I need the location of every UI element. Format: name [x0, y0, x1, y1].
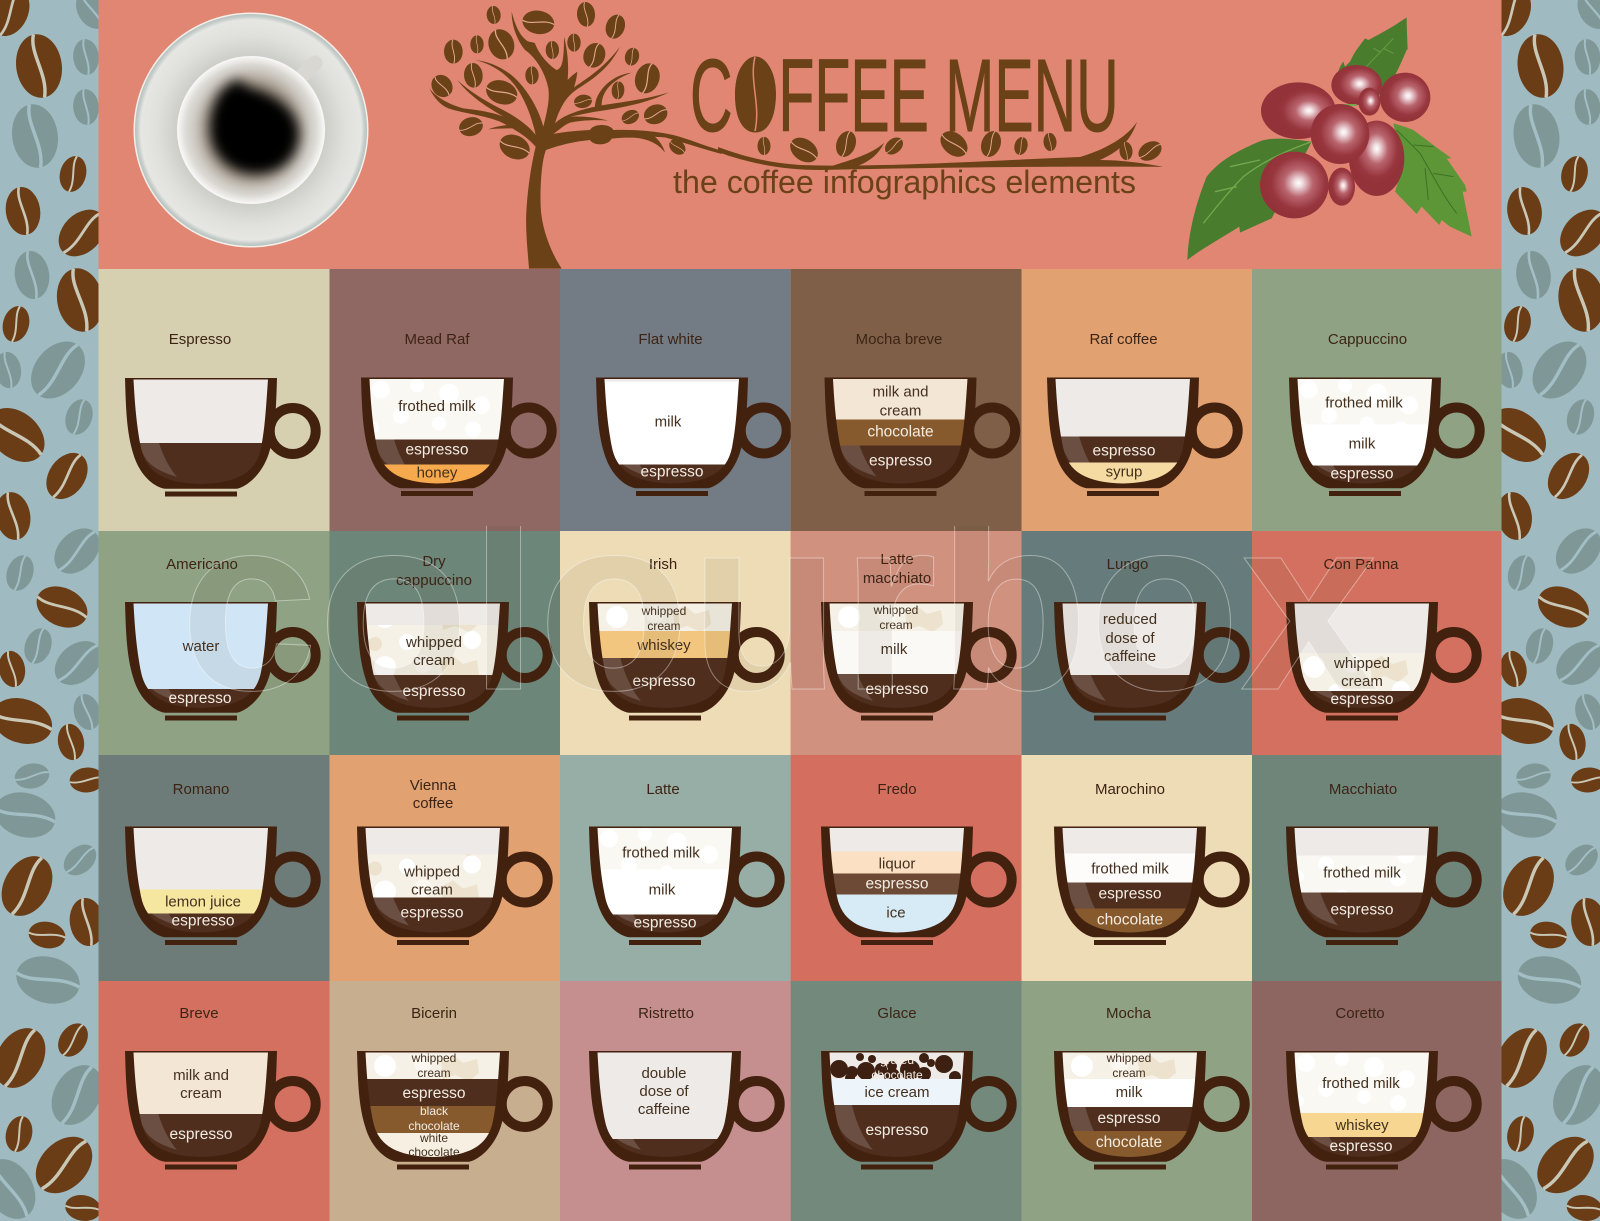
heading: Irish: Irish — [649, 556, 677, 573]
cup: Mocha — [1054, 1051, 1245, 1170]
tree beans — [427, 1, 1165, 168]
cup: Mocha: whipped — [1106, 1051, 1151, 1065]
panel: Latte — [560, 755, 791, 981]
cup: Con Panna — [1286, 602, 1477, 720]
heading: Dry cappuccino: Dry — [422, 553, 446, 570]
cup: Coretto — [1286, 1051, 1477, 1170]
panel: Con Panna — [1252, 531, 1502, 755]
cup: Mocha: milk — [1116, 1084, 1143, 1101]
cup: Dry cappuccino — [357, 602, 548, 720]
panel: Macchiato — [1252, 755, 1502, 981]
heading: Cappuccino: Cappuccino — [1328, 331, 1407, 348]
cup: Latte macchiato: milk — [881, 641, 908, 658]
cup: Glace: espresso — [866, 1122, 928, 1139]
cup: Bicerin: whipped — [411, 1051, 456, 1065]
cup: Fredo: ice — [886, 904, 906, 922]
panel: Ristretto — [560, 981, 791, 1221]
cup: Bicerin — [357, 1051, 548, 1170]
cup: Breve — [125, 1051, 316, 1170]
heading: Americano: Americano — [166, 556, 238, 573]
left coffee bean strip — [0, 0, 115, 1221]
cup: Raf coffee — [1047, 378, 1238, 496]
cup: Glace: ice cream — [864, 1084, 930, 1101]
cup: Con Panna: whipped — [1333, 655, 1390, 672]
cup: Bicerin: white — [419, 1131, 448, 1145]
heading: Lungo: Lungo — [1107, 556, 1148, 573]
panel: Espresso — [98, 269, 330, 531]
cup: Breve: cream — [180, 1085, 222, 1102]
cup: Vienna coffee: whipped — [403, 864, 460, 880]
cup: Irish: whipped — [641, 604, 686, 618]
cup: Irish — [589, 602, 780, 720]
cup: Mocha breve: espresso — [869, 452, 932, 470]
cup: Irish: whiskey — [636, 637, 691, 654]
cup: Romano — [125, 826, 316, 945]
cup: Fredo: espresso — [866, 876, 928, 892]
heading: Romano: Romano — [173, 781, 229, 798]
cup: Bicerin: chocolate — [408, 1119, 460, 1133]
cup: Mocha breve — [824, 378, 1015, 496]
cup: Glace: grated — [880, 1053, 914, 1067]
heading: Breve: Breve — [179, 1005, 219, 1022]
heading: Mocha: Mocha — [1106, 1005, 1152, 1022]
heading: Fredo: Fredo — [877, 781, 917, 798]
cup: Lungo: dose of — [1105, 630, 1155, 647]
panel: Mocha — [1022, 981, 1252, 1221]
panel: Breve — [98, 981, 330, 1221]
heading: Latte macchiato: Latte — [880, 551, 914, 568]
cup: Marochino: espresso — [1099, 886, 1161, 902]
panel: Fredo — [791, 755, 1022, 981]
panel: Bicerin — [330, 981, 560, 1221]
cup: Macchiato: frothed milk — [1323, 864, 1401, 882]
panel: Lungo — [1022, 531, 1252, 755]
cup: Latte: espresso — [634, 914, 696, 932]
cup: Ristretto — [589, 1051, 780, 1170]
cup: Romano: lemon juice — [165, 894, 241, 910]
heading: Raf coffee: Raf coffee — [1089, 331, 1158, 348]
cup: Macchiato — [1286, 826, 1477, 945]
heading: Con Panna: Con Panna — [1323, 556, 1399, 573]
cup: Mead Raf: honey — [417, 464, 458, 482]
cup: Flat white: milk — [655, 414, 682, 430]
heading: Latte macchiato: macchiato — [863, 570, 931, 587]
cup: Glace: chocolate — [871, 1068, 923, 1082]
cup: Glace — [821, 1051, 1012, 1170]
cup: Vienna coffee: cream — [411, 882, 453, 898]
cup: Irish: espresso — [633, 673, 695, 690]
cup: Vienna coffee: espresso — [401, 904, 463, 922]
cup: Cappuccino: milk — [1349, 436, 1376, 452]
cup: Fredo — [821, 826, 1012, 945]
heading: Marochino: Marochino — [1095, 781, 1165, 798]
cup: Mocha breve: chocolate — [867, 424, 934, 440]
cup: Latte: frothed milk — [622, 844, 700, 862]
title: COFFEE MENU: COFFEE MENU — [690, 38, 1119, 153]
heading: Bicerin: Bicerin — [411, 1005, 457, 1022]
cup: Bicerin: cream — [417, 1066, 451, 1080]
panel: Raf coffee — [1022, 269, 1252, 531]
cup: Dry cappuccino: espresso — [403, 683, 465, 700]
heading: Vienna coffee: coffee — [413, 795, 453, 812]
cup: Cappuccino — [1289, 378, 1480, 496]
cup: Irish: cream — [647, 619, 681, 633]
cup: Coretto: whiskey — [1334, 1117, 1389, 1134]
cup: Cappuccino: espresso — [1331, 466, 1393, 482]
cup: Dry cappuccino: cream — [413, 652, 455, 669]
cup: Americano: water — [182, 638, 219, 655]
icon: coffee bean letter O — [735, 56, 776, 132]
panel: Flat white — [560, 269, 791, 531]
panel: Cappuccino — [1252, 269, 1502, 531]
cup: Latte: milk — [649, 882, 676, 898]
heading: Latte: Latte — [646, 781, 680, 798]
cup: Lungo — [1054, 602, 1245, 720]
cup: Marochino — [1054, 826, 1245, 945]
cup: Coretto: espresso — [1330, 1138, 1392, 1155]
panel: Mead Raf — [330, 269, 560, 531]
heading: Mocha breve: Mocha breve — [856, 331, 942, 348]
heading: Dry cappuccino: cappuccino — [396, 572, 472, 589]
icon: top-down coffee cup on saucer — [134, 12, 368, 248]
cup: Mocha breve: milk and — [873, 384, 928, 400]
subtitle: the coffee infographics elements — [673, 164, 1136, 200]
cup: Raf coffee: espresso — [1093, 442, 1155, 460]
heading: Ristretto: Ristretto — [638, 1005, 694, 1022]
cup: Mocha: espresso — [1098, 1110, 1160, 1127]
cup: Latte — [589, 826, 780, 945]
cup: Ristretto: double — [641, 1065, 687, 1082]
cup: Lungo: caffeine — [1104, 648, 1156, 665]
cup: Latte macchiato: whipped — [873, 603, 918, 617]
panel: Latte macchiato — [791, 531, 1022, 755]
cup: Cappuccino: frothed milk — [1325, 394, 1403, 412]
cup: Macchiato: espresso — [1331, 902, 1393, 918]
panel: Vienna coffee — [330, 755, 560, 981]
heading: Coretto: Coretto — [1335, 1005, 1385, 1022]
cup: Raf coffee: syrup — [1106, 464, 1142, 480]
cup: Latte macchiato — [821, 602, 1012, 720]
cup: Flat white: espresso — [641, 464, 703, 480]
right coffee bean strip — [1476, 0, 1600, 1221]
cup: Bicerin: espresso — [403, 1085, 465, 1102]
heading: Flat white: Flat white — [638, 331, 703, 348]
cup: Lungo: reduced — [1103, 611, 1157, 628]
heading: Espresso: Espresso — [169, 331, 231, 348]
cup: Mocha: cream — [1112, 1066, 1146, 1080]
cup: Romano: espresso — [172, 912, 234, 930]
cup: Ristretto: caffeine — [638, 1101, 690, 1118]
cup: Marochino: chocolate — [1097, 912, 1163, 928]
cup: Breve: milk and — [173, 1067, 229, 1084]
panel: Coretto — [1252, 981, 1502, 1221]
watermark: colourbox: colourbox — [180, 464, 1378, 742]
header banner — [98, 0, 1502, 269]
heading: Glace: Glace — [877, 1005, 917, 1022]
heading: Macchiato: Macchiato — [1329, 781, 1397, 798]
panel: Glace — [791, 981, 1022, 1221]
heading: Mead Raf: Mead Raf — [404, 331, 470, 348]
cup: Bicerin: chocolate — [408, 1145, 460, 1159]
cup: Mead Raf: espresso — [406, 442, 468, 458]
cup: Mead Raf — [361, 378, 552, 496]
cup: Latte macchiato: espresso — [866, 681, 928, 698]
panel: Irish — [560, 531, 791, 755]
panel: Romano — [98, 755, 330, 981]
cup: Flat white — [596, 378, 787, 496]
cup: Mocha breve: cream — [880, 402, 921, 420]
cup: Dry cappuccino: whipped — [405, 634, 462, 651]
panel: Dry cappuccino — [330, 531, 560, 755]
cup: Vienna coffee — [357, 826, 548, 945]
icon: coffee bean tree with long branch — [429, 12, 1163, 269]
cup: Espresso — [125, 378, 316, 496]
cup: Bicerin: black — [420, 1104, 449, 1118]
cup: Mocha: chocolate — [1096, 1134, 1162, 1151]
cup: Fredo: liquor — [879, 856, 915, 872]
cup: Breve: espresso — [170, 1126, 232, 1143]
cup: Latte macchiato: cream — [879, 618, 913, 632]
cup: Con Panna: cream — [1341, 673, 1383, 690]
cup: Ristretto: dose of — [639, 1083, 689, 1100]
cup: Americano — [125, 602, 316, 720]
cup: Marochino: frothed milk — [1091, 860, 1169, 878]
panel: Mocha breve — [791, 269, 1022, 531]
cup: Americano: espresso — [169, 690, 231, 707]
cup: Mead Raf: frothed milk — [398, 398, 476, 415]
cup: Con Panna: espresso — [1331, 691, 1393, 708]
heading: Vienna coffee: Vienna — [410, 777, 456, 794]
cup: Coretto: frothed milk — [1322, 1075, 1400, 1092]
panel: Marochino — [1022, 755, 1252, 981]
icon: coffee berries with leaves — [1187, 17, 1472, 260]
panel: Americano — [98, 531, 330, 755]
